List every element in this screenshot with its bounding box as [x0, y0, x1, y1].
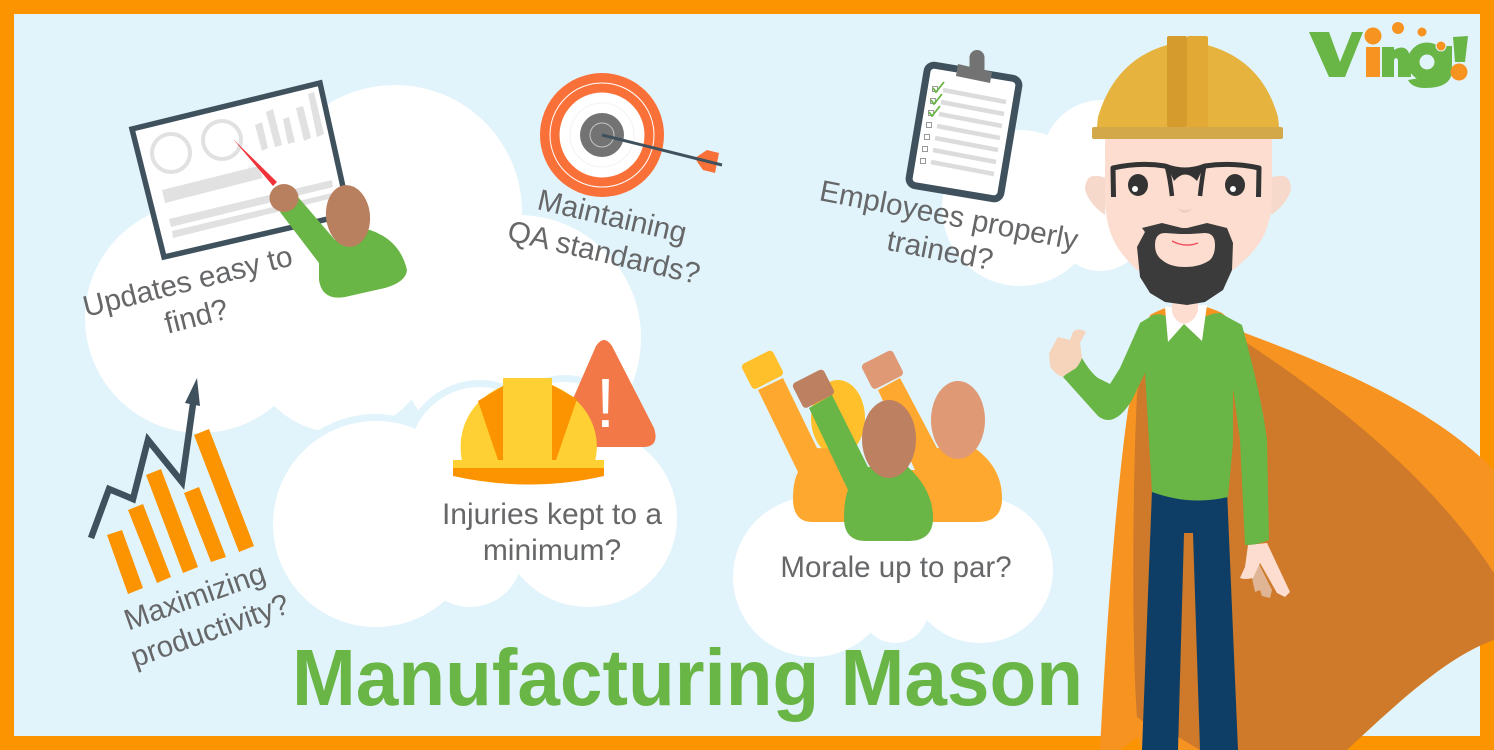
- text: maintaining QA standards: QA standards?: [504, 215, 703, 291]
- icon: hard hat: [453, 378, 604, 484]
- text: updates easy to find: Updates easy to: [80, 240, 296, 324]
- person green front: [791, 368, 933, 541]
- logo: Ving!: [1309, 22, 1468, 88]
- text: morale up to par: Morale up to par?: [780, 551, 1012, 584]
- collar: [1165, 305, 1207, 342]
- sweater: [1063, 313, 1269, 545]
- character: Manufacturing Mason: [1049, 36, 1494, 750]
- icon: productivity chart: [91, 378, 254, 594]
- person yellow: [740, 349, 865, 522]
- glasses: [1113, 164, 1259, 197]
- panel: cloud top left: [85, 85, 641, 461]
- thumbs up hand: [1049, 330, 1086, 377]
- text: maintaining QA standards: Maintaining: [534, 184, 690, 250]
- hand open: [1240, 543, 1290, 598]
- panel: cloud employees: [942, 100, 1162, 286]
- cape: [1100, 304, 1494, 750]
- panel: cloud middle: [273, 382, 677, 627]
- figure pointing: [270, 183, 407, 298]
- icon: cheering team: [740, 349, 1002, 541]
- text: employees properly trained: Employees properly: [817, 174, 1081, 257]
- eyes: [1128, 174, 1245, 196]
- panel: cloud morale: [733, 497, 1053, 657]
- icon: clipboard: [908, 50, 1020, 200]
- text: maximizing productivity: Maximizing: [120, 557, 270, 637]
- text: employees properly trained: trained?: [884, 224, 996, 277]
- icon: warning triangle: [555, 340, 656, 447]
- panel: cloud middle halo: [266, 375, 640, 634]
- icon: presentation board: [132, 83, 407, 298]
- person orange back: [860, 349, 1002, 522]
- text: updates easy to find: find?: [161, 293, 232, 341]
- icon: warning triangle: !: [596, 364, 615, 442]
- icon: target and dart: [540, 73, 722, 197]
- ears: [1085, 176, 1291, 215]
- beard: [1137, 223, 1233, 305]
- legs: [1142, 490, 1238, 750]
- neck: [1172, 298, 1198, 324]
- hard hat: [1092, 36, 1283, 139]
- face: [1105, 135, 1272, 290]
- text: injuries kept to a minimum: Injuries kept to a: [442, 498, 662, 531]
- text: injuries kept to a minimum: minimum?: [483, 534, 621, 567]
- text: maximizing productivity: productivity?: [126, 588, 294, 674]
- nose: [1177, 208, 1193, 213]
- title: Manufacturing Mason: [292, 633, 1083, 722]
- mouth: [1172, 241, 1198, 245]
